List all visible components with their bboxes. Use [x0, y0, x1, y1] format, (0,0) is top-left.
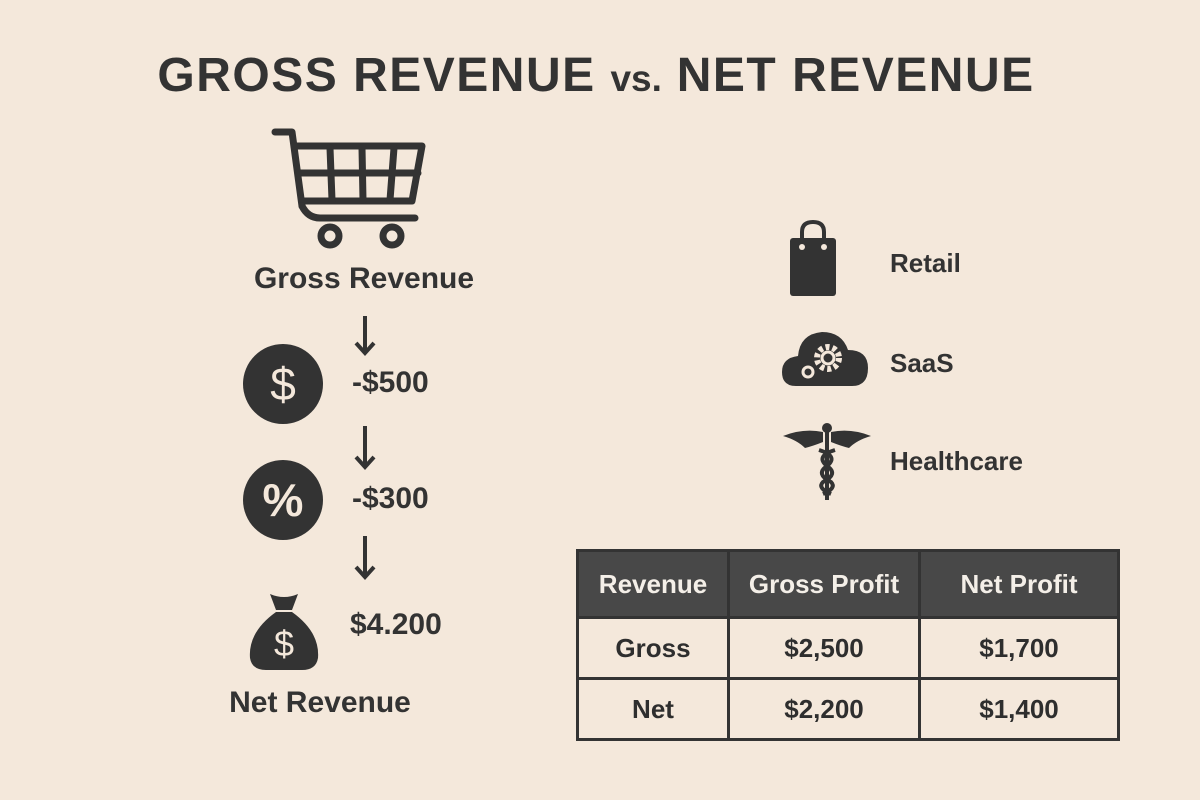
- table: revenue comparison: Revenue: [599, 568, 707, 598]
- arrow 2: [354, 426, 376, 470]
- label: healthcare: Healthcare: [890, 446, 1023, 476]
- arrow 1: [354, 316, 376, 356]
- table: revenue comparison: Gross: [615, 632, 691, 662]
- table: revenue comparison: Net: [632, 694, 674, 724]
- arrow 3: [354, 536, 376, 580]
- table: revenue comparison: $1,400: [979, 694, 1059, 724]
- table: revenue comparison: [576, 549, 1120, 741]
- text: -$300: -$300: [352, 482, 429, 515]
- table: revenue comparison: $1,700: [979, 632, 1059, 662]
- table: revenue comparison: $2,200: [784, 694, 864, 724]
- icon: percent circle: [243, 460, 323, 540]
- icon: money bag: $: [274, 623, 294, 664]
- icon: shopping bag: [790, 220, 836, 296]
- table: revenue comparison: Net Profit: [960, 568, 1078, 598]
- icon: cloud with gears: [782, 332, 868, 386]
- icon: shopping cart: [272, 128, 426, 248]
- label: gross revenue: Gross Revenue: [254, 262, 474, 295]
- text: $4.200: $4.200: [350, 608, 442, 641]
- icon: percent circle: %: [263, 474, 303, 526]
- title: GROSS REVENUE vs. NET REVENUE: [157, 49, 1035, 102]
- icon: caduceus: [783, 423, 871, 500]
- table: revenue comparison: Gross Profit: [749, 568, 899, 598]
- label: retail: Retail: [890, 248, 961, 278]
- table: revenue comparison: $2,500: [784, 632, 864, 662]
- icon: dollar circle: [243, 344, 323, 424]
- label: saas: SaaS: [890, 348, 954, 378]
- text: -$500: -$500: [352, 366, 429, 399]
- label: net revenue: Net Revenue: [229, 686, 411, 719]
- icon: money bag: [250, 594, 318, 670]
- icon: dollar circle: $: [270, 358, 296, 410]
